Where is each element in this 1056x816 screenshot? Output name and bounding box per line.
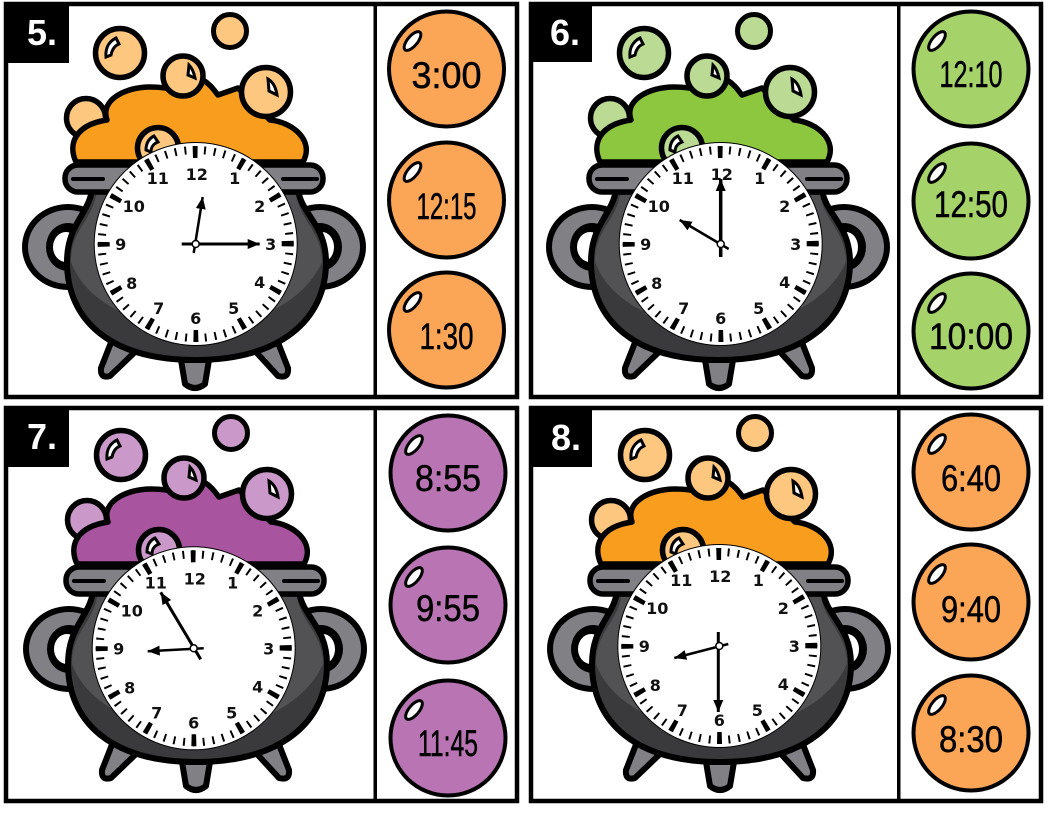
card 5 number bbox=[8, 5, 69, 63]
clock numerals: 7 bbox=[153, 299, 164, 318]
clock numerals: 7 bbox=[677, 701, 688, 720]
clock numerals: 2 bbox=[252, 601, 263, 620]
answer bubble 12:15 bbox=[389, 142, 504, 258]
clock numerals: 12 bbox=[184, 569, 206, 588]
clock numerals: 9 bbox=[113, 639, 124, 658]
clock numerals: 4 bbox=[778, 675, 789, 694]
answer bubble 9:55: 9:55 bbox=[416, 588, 480, 629]
card 6 number: 6. bbox=[550, 12, 580, 53]
clock numerals: 5 bbox=[228, 299, 239, 318]
clock numerals: 6 bbox=[188, 713, 199, 732]
panel: card 7 bbox=[6, 408, 517, 801]
clock numerals: 12 bbox=[709, 567, 731, 586]
clock numerals: 7 bbox=[678, 299, 689, 318]
clock hands bbox=[680, 179, 729, 257]
clock: 10:00 bbox=[619, 142, 823, 346]
answer bubble 9:40: 9:40 bbox=[941, 589, 1001, 630]
clock numerals: 4 bbox=[779, 273, 790, 292]
clock hands bbox=[182, 197, 260, 253]
clock numerals: 12 bbox=[186, 165, 208, 184]
clock numerals bbox=[113, 569, 274, 732]
panel: card 6 bbox=[531, 4, 1041, 397]
card 8 border bbox=[531, 408, 1041, 801]
clock numerals: 8 bbox=[651, 274, 662, 293]
clock numerals: 2 bbox=[778, 599, 789, 618]
answer bubble 9:40 bbox=[914, 544, 1028, 660]
clock numerals: 1 bbox=[227, 573, 238, 592]
cauldron with orange brew bbox=[22, 14, 366, 388]
card 7 border bbox=[6, 408, 517, 801]
clock numerals: 4 bbox=[252, 677, 263, 696]
clock numerals: 8 bbox=[650, 676, 661, 695]
clock numerals: 11 bbox=[145, 573, 167, 592]
cauldron with green brew bbox=[546, 14, 890, 388]
card 7 number bbox=[8, 409, 69, 467]
card 7 divider bbox=[374, 410, 377, 800]
answer bubble 11:45 bbox=[390, 680, 506, 796]
answer bubble 6:40: 6:40 bbox=[941, 458, 1001, 499]
answer bubble 8:30: 8:30 bbox=[939, 719, 1003, 760]
clock numerals: 11 bbox=[672, 169, 694, 188]
answer bubble 12:50: 12:50 bbox=[934, 184, 1008, 225]
clock numerals: 5 bbox=[752, 701, 763, 720]
answer bubble 10:00 bbox=[914, 274, 1028, 388]
answer bubble 6:40 bbox=[914, 414, 1028, 530]
clock: 8:55 bbox=[92, 546, 296, 750]
answer bubble 8:55 bbox=[390, 416, 506, 530]
clock numerals: 7 bbox=[151, 703, 162, 722]
answer bubble 12:10 bbox=[914, 12, 1028, 126]
clock numerals: 1 bbox=[754, 169, 765, 188]
clock numerals: 10 bbox=[121, 601, 143, 620]
clock numerals bbox=[639, 567, 800, 730]
clock numerals: 2 bbox=[254, 197, 265, 216]
answer bubble 12:10: 12:10 bbox=[940, 54, 1002, 95]
card 8 divider bbox=[897, 410, 900, 800]
clock numerals: 9 bbox=[639, 637, 650, 656]
clock numerals: 11 bbox=[147, 169, 169, 188]
clock numerals: 11 bbox=[670, 571, 692, 590]
clock numerals: 10 bbox=[123, 197, 145, 216]
clock numerals: 6 bbox=[190, 309, 201, 328]
clock numerals: 5 bbox=[226, 703, 237, 722]
card 6 border bbox=[531, 4, 1041, 397]
answer bubble 12:15: 12:15 bbox=[416, 186, 476, 227]
answer bubble 8:55: 8:55 bbox=[415, 458, 481, 499]
clock numerals: 9 bbox=[115, 235, 126, 254]
clock numerals: 6 bbox=[715, 309, 726, 328]
answer bubble 12:50 bbox=[914, 144, 1028, 258]
answer bubble 11:45: 11:45 bbox=[418, 723, 478, 764]
answer bubble 9:55 bbox=[390, 548, 506, 662]
cauldron with purple brew bbox=[23, 416, 367, 790]
answer bubble 1:30: 1:30 bbox=[420, 316, 474, 357]
clock numerals: 8 bbox=[124, 678, 135, 697]
clock numerals: 3 bbox=[263, 639, 274, 658]
clock: 3:00 bbox=[94, 142, 298, 346]
clock numerals bbox=[640, 165, 801, 328]
clock numerals: 10 bbox=[648, 197, 670, 216]
panel: card 8 bbox=[531, 408, 1041, 801]
clock numerals: 1 bbox=[229, 169, 240, 188]
clock numerals: 3 bbox=[789, 637, 800, 656]
clock: hands near 8:30 bbox=[617, 544, 821, 748]
clock numerals: 6 bbox=[714, 711, 725, 730]
clock hands bbox=[148, 592, 204, 659]
card 6 number bbox=[532, 5, 592, 62]
card 5 border bbox=[6, 4, 517, 397]
clock numerals: 9 bbox=[640, 235, 651, 254]
clock numerals: 1 bbox=[753, 571, 764, 590]
clock numerals: 5 bbox=[753, 299, 764, 318]
card 5 number: 5. bbox=[27, 12, 57, 53]
answer bubble 10:00: 10:00 bbox=[929, 316, 1013, 357]
card 6 divider bbox=[897, 6, 900, 396]
answer bubble 3:00: 3:00 bbox=[412, 55, 482, 96]
panel: card 5 bbox=[6, 4, 517, 397]
cauldron with orange brew bbox=[547, 416, 891, 790]
answer bubble 1:30 bbox=[389, 272, 504, 388]
clock numerals: 3 bbox=[265, 235, 276, 254]
clock numerals: 8 bbox=[126, 274, 137, 293]
card 8 number: 8. bbox=[551, 417, 581, 458]
clock numerals: 12 bbox=[711, 165, 733, 184]
clock numerals bbox=[115, 165, 276, 328]
card 8 number bbox=[532, 409, 592, 467]
clock numerals: 10 bbox=[646, 599, 668, 618]
answer bubble 8:30 bbox=[914, 676, 1028, 790]
clock hands bbox=[674, 632, 728, 712]
clock numerals: 3 bbox=[790, 235, 801, 254]
clock numerals: 4 bbox=[254, 273, 265, 292]
card 7 number: 7. bbox=[27, 416, 57, 457]
clock numerals: 2 bbox=[779, 197, 790, 216]
card 5 divider bbox=[374, 6, 377, 396]
answer bubble 3:00 bbox=[389, 12, 504, 126]
